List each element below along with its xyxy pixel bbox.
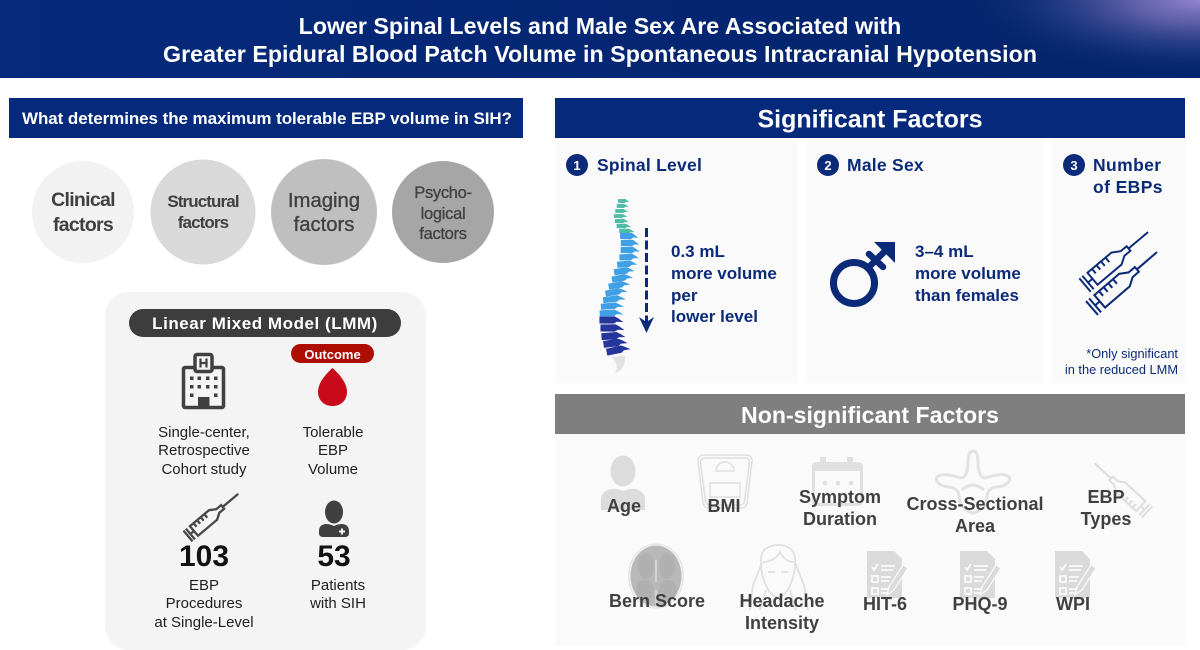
text: male sex effect [915, 242, 1021, 305]
badge 3: 3 [1070, 158, 1078, 173]
title banner: Greater Epidural Blood Patch Volume in Spontaneous Intracranial Hypotension [163, 41, 1037, 67]
outcome pill: Outcome [304, 347, 361, 362]
item: BMI [698, 455, 752, 516]
text: spinal level effect: more volume [671, 264, 777, 283]
item: cross-sectional area: Cross-Sectional [906, 494, 1044, 514]
circle: psychological factors: logical [421, 205, 465, 223]
icon: blood drop [318, 368, 347, 406]
text: outcome: Volume [308, 461, 358, 478]
panel: number of EBPs [1051, 140, 1185, 383]
text: male sex effect: 3–4 mL [915, 242, 974, 261]
circle: structural factors: factors [178, 213, 229, 232]
LMM pill heading: Linear Mixed Model (LMM) [152, 314, 378, 333]
circle: clinical factors [32, 161, 134, 263]
panel: non-significant factors [555, 434, 1185, 646]
badge 1: 1 [573, 158, 581, 173]
item: EBP types: Types [1081, 509, 1131, 529]
LMM pill heading [129, 309, 401, 337]
text: spinal level effect: per [671, 286, 698, 305]
text: outcome [303, 424, 363, 478]
badge 3 [1063, 154, 1085, 176]
item: age: Age [607, 496, 641, 516]
heading: number of EBPs: Number [1093, 155, 1162, 175]
circle: structural factors: Structural [167, 192, 239, 211]
circle: psychological factors: Psycho- [414, 184, 472, 202]
item: cross-sectional area: Area [955, 516, 996, 536]
text: EBP procedures: at Single-Level [154, 614, 254, 631]
significant factors heading [555, 98, 1185, 138]
text: patients with SIH: Patients [311, 577, 365, 594]
heading: male sex: Male Sex [847, 155, 924, 175]
number: 53 patients: 53 [317, 540, 351, 573]
badge 1 [566, 154, 588, 176]
badge 2 [817, 154, 839, 176]
item: WPI [1055, 551, 1096, 614]
item: age [601, 456, 645, 516]
outcome pill [291, 344, 374, 363]
text: EBP procedures: Procedures [166, 595, 242, 612]
icon: hospital [184, 354, 224, 408]
text: outcome: Tolerable [303, 424, 363, 441]
item: EBP types: EBP [1087, 487, 1125, 507]
heading: number of EBPs: of EBPs [1093, 177, 1163, 197]
item: symptom duration: Duration [803, 509, 877, 529]
item: headache intensity: Intensity [745, 613, 819, 633]
icon: male symbol [834, 242, 895, 304]
title banner [0, 0, 1200, 78]
badge 2: 2 [824, 158, 832, 173]
arrow: dashed down [639, 228, 654, 333]
item: headache intensity: Headache [739, 591, 825, 611]
circle: imaging factors: Imaging [288, 190, 360, 212]
item: symptom duration [799, 457, 881, 529]
footnote: *Only significant [1086, 346, 1178, 361]
item: PHQ-9: PHQ-9 [952, 594, 1008, 614]
item: symptom duration: Symptom [799, 487, 881, 507]
circle: psychological factors: factors [419, 225, 467, 243]
text: spinal level effect [671, 242, 777, 326]
item: EBP types [1081, 458, 1152, 529]
text: study design: Single-center, [158, 424, 250, 441]
text: study design: Retrospective [158, 442, 250, 459]
question heading bar [9, 98, 523, 138]
item: PHQ-9 [952, 551, 1008, 614]
item: Bern score: Bern Score [609, 591, 705, 611]
item: headache intensity [739, 545, 825, 633]
circle: imaging factors [271, 159, 377, 265]
text: male sex effect: more volume [915, 264, 1021, 283]
non-significant factors heading [555, 394, 1185, 434]
item: cross-sectional area [906, 451, 1044, 536]
text: study design: Cohort study [161, 461, 247, 478]
text: patients with SIH: with SIH [309, 595, 366, 612]
text: EBP procedures: EBP [189, 577, 219, 594]
circle: clinical factors: factors [53, 214, 114, 236]
text: patients with SIH [309, 577, 366, 612]
factor circles [32, 159, 494, 265]
circle: imaging factors: factors [294, 214, 354, 236]
title text: Lower Spinal Levels and Male Sex Are Associated with [299, 13, 901, 39]
question heading bar: What determines the maximum tolerable EBP volume in SIH? [22, 109, 512, 128]
text: spinal level effect: lower level [671, 307, 758, 326]
icon: spine [599, 199, 640, 373]
panel: linear mixed model [105, 292, 426, 650]
footnote: in the reduced LMM [1065, 362, 1178, 377]
heading: number of EBPs [1093, 155, 1163, 197]
heading: spinal level: Spinal Level [597, 155, 702, 175]
circle: clinical factors: Clinical [51, 189, 115, 211]
text: male sex effect: than females [915, 286, 1019, 305]
item: HIT-6: HIT-6 [863, 594, 907, 614]
circle: structural factors [150, 160, 256, 264]
item: HIT-6 [863, 551, 908, 614]
panel: male sex [807, 140, 1043, 383]
item: WPI: WPI [1056, 594, 1090, 614]
icon: two syringes [1079, 225, 1163, 315]
item: BMI: BMI [708, 496, 740, 516]
footnote [1065, 346, 1178, 377]
icon: syringe [183, 489, 243, 541]
text: outcome: EBP [318, 442, 348, 459]
text: EBP procedures [154, 577, 254, 631]
text: study design [158, 424, 250, 478]
significant factors heading: Significant Factors [757, 106, 983, 134]
icon: patient [319, 500, 349, 537]
text: spinal level effect: 0.3 mL [671, 242, 725, 261]
circle: psychological factors [392, 161, 494, 263]
panel: spinal level [555, 140, 798, 383]
non-significant factors heading: Non-significant Factors [741, 402, 999, 428]
item: Bern score [609, 544, 705, 611]
number: 103 procedures: 103 [179, 540, 229, 573]
